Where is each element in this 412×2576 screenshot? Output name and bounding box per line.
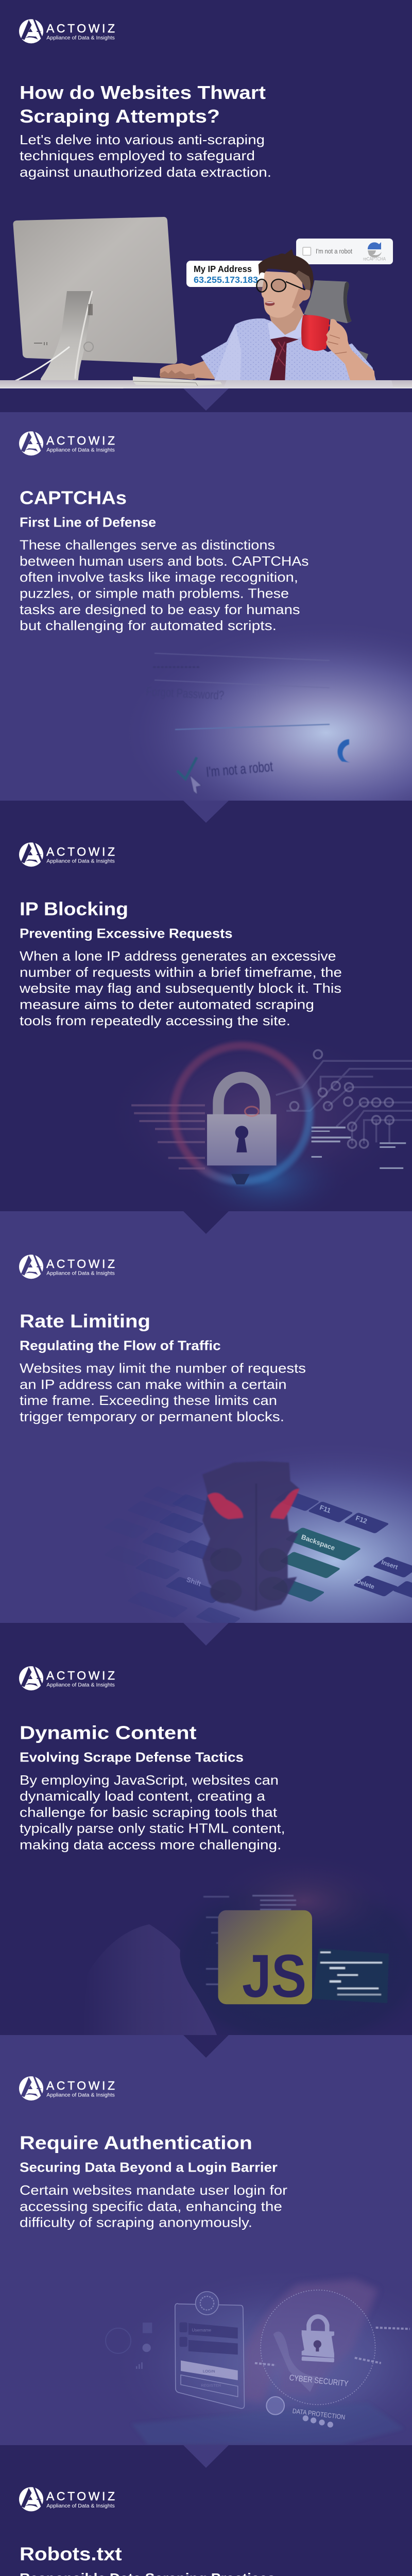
image: traffic light on keyboard: Backspace	[300, 1533, 336, 1552]
hooded person silhouette	[82, 1924, 217, 2036]
body text: tools from repeatedly accessing the site.	[20, 1013, 290, 1028]
keyboard	[133, 377, 222, 386]
logo: Actowiz: Appliance of Data & Insights	[46, 858, 115, 865]
image: blurred captcha screen: I'm not a robot	[205, 758, 273, 780]
logo: Actowiz: ACTOWIZ	[46, 22, 115, 35]
IP address card	[186, 261, 266, 287]
body text: trigger temporary or permanent blocks.	[20, 1409, 284, 1425]
image: traffic light on keyboard: Shift	[185, 1575, 202, 1588]
image: login form and cyber security globe: Username	[192, 2328, 212, 2333]
image: login form and cyber security globe: DATA PROTECTION	[292, 2407, 346, 2421]
arrow: down triangle	[183, 388, 229, 411]
heading: IP Blocking	[20, 899, 128, 919]
logo: Actowiz	[19, 19, 115, 43]
logo: Actowiz: ACTOWIZ	[46, 2079, 115, 2092]
panel: Robots.txt	[19, 2445, 276, 2576]
logo: Actowiz: Appliance of Data & Insights	[46, 2503, 115, 2509]
subheading: Evolving Scrape Defense Tactics	[20, 1749, 244, 1765]
heading: Require Authentication	[20, 2132, 252, 2153]
logo: Actowiz	[19, 2076, 115, 2100]
arrow: down triangle	[183, 1211, 229, 1234]
body text	[19, 948, 342, 1028]
logo: Actowiz: ACTOWIZ	[46, 845, 115, 858]
logo: Actowiz: ACTOWIZ	[46, 1257, 115, 1270]
image: blurred captcha screen: ••••••••••••	[152, 664, 200, 671]
image: padlock over circuit board	[103, 1025, 412, 1211]
image: traffic light on keyboard: F12	[355, 1514, 368, 1525]
logo: Actowiz: ACTOWIZ	[46, 2489, 115, 2503]
panel: IP Blocking	[19, 801, 412, 1207]
body text: between human users and bots. CAPTCHAs	[20, 553, 309, 569]
logo: Actowiz: ACTOWIZ	[46, 434, 115, 447]
image: login form and cyber security globe: CYBER SECURITY	[289, 2374, 349, 2388]
logo: Actowiz: ACTOWIZ	[46, 1669, 115, 1682]
logo: Actowiz: Appliance of Data & Insights	[46, 1270, 115, 1277]
arrow: down triangle	[183, 2035, 229, 2058]
logo: Actowiz	[19, 1255, 115, 1279]
desktop monitor from behind	[0, 217, 177, 388]
body text: When a lone IP address generates an excessive	[20, 948, 336, 963]
body text: time frame. Exceeding these limits can	[20, 1393, 277, 1408]
arrow: down triangle	[183, 2445, 229, 2468]
body text: often involve tasks like image recognition,	[20, 569, 298, 585]
IP address card: 63.255.173.183	[194, 275, 258, 285]
arrow: down triangle	[183, 801, 229, 823]
intro text: Let's delve into various anti-scraping	[20, 132, 265, 147]
body text: website may flag and subsequently block it. This	[19, 980, 341, 996]
body text: number of requests within a brief timeframe, the	[20, 964, 342, 980]
subheading: Regulating the Flow of Traffic	[20, 1337, 221, 1353]
body text: challenge for basic scraping tools that	[20, 1804, 278, 1820]
body text: Certain websites mandate user login for	[20, 2182, 287, 2198]
title: Scraping Attempts?	[20, 106, 220, 127]
title	[20, 82, 266, 127]
panel: Require Authentication	[0, 2035, 412, 2445]
body text: Websites may limit the number of requests	[20, 1360, 306, 1376]
body text	[20, 1360, 306, 1425]
logo: Actowiz: Appliance of Data & Insights	[46, 447, 115, 453]
logo: Actowiz	[19, 2487, 115, 2511]
heading: Dynamic Content	[20, 1722, 197, 1743]
arrow: down triangle	[183, 1623, 229, 1646]
intro text	[20, 132, 271, 180]
image: blurred captcha screen	[93, 618, 412, 804]
panel: hero introduction	[0, 19, 412, 411]
logo: Actowiz	[19, 842, 115, 867]
tooltip panel	[313, 1948, 389, 2003]
subheading: Securing Data Beyond a Login Barrier	[20, 2159, 278, 2175]
intro text: techniques employed to safeguard	[20, 148, 255, 163]
body text: measure aims to deter automated scraping	[20, 997, 314, 1012]
body text: an IP address can make within a certain	[20, 1377, 287, 1392]
panel: Dynamic Content	[19, 1623, 390, 2035]
reCAPTCHA card: reCAPTCHA	[363, 257, 386, 262]
body text	[20, 1772, 285, 1852]
reCAPTCHA card	[296, 239, 393, 264]
subheading: Preventing Excessive Requests	[20, 925, 233, 941]
logo: Actowiz: Appliance of Data & Insights	[46, 35, 115, 41]
body text: By employing JavaScript, websites can	[20, 1772, 279, 1788]
body text: but challenging for automated scripts.	[20, 618, 277, 633]
logo: Actowiz	[19, 1666, 115, 1690]
IP address card: My IP Address	[194, 264, 252, 274]
image: traffic light on keyboard	[103, 1432, 412, 1628]
image: login form and cyber security globe: REGISTER	[201, 2383, 221, 2388]
panel: CAPTCHAs	[0, 412, 412, 801]
image: traffic light on keyboard: Insert	[381, 1558, 399, 1571]
heading: Robots.txt	[20, 2543, 122, 2564]
title: How do Websites Thwart	[20, 82, 266, 103]
logo: Actowiz: Appliance of Data & Insights	[46, 1682, 115, 1688]
image: code editor with JS badge	[82, 1852, 412, 2036]
body text: dynamically load content, creating a	[20, 1788, 266, 1804]
body text: accessing specific data, enhancing the	[20, 2198, 282, 2214]
body text: difficulty of scraping anonymously.	[20, 2214, 252, 2230]
man at desk holding red mug	[160, 249, 376, 381]
logo: Actowiz: Appliance of Data & Insights	[46, 2092, 115, 2098]
intro text: against unauthorized data extraction.	[20, 164, 271, 180]
reCAPTCHA card: I'm not a robot	[316, 248, 352, 255]
body text	[20, 2182, 287, 2230]
subheading: First Line of Defense	[20, 514, 156, 530]
image: login form and cyber security globe	[103, 2262, 412, 2445]
JS badge	[218, 1910, 312, 2010]
heading: Rate Limiting	[20, 1311, 150, 1331]
image: blurred captcha screen: Forgot Password?	[146, 685, 225, 703]
panel: Rate Limiting	[0, 1211, 412, 1623]
image: login form and cyber security globe: LOGIN	[203, 2369, 215, 2374]
logo: Actowiz	[19, 431, 115, 455]
body text	[20, 537, 309, 633]
body text: puzzles, or simple math problems. These	[20, 586, 289, 601]
image: traffic light on keyboard: Delete	[355, 1578, 375, 1591]
body text: making data access more challenging.	[20, 1837, 281, 1852]
body text: tasks are designed to be easy for humans	[20, 602, 300, 617]
body text: typically parse only static HTML content,	[20, 1821, 285, 1836]
heading: CAPTCHAs	[20, 487, 127, 509]
image: traffic light on keyboard: F11	[319, 1503, 332, 1515]
JS badge: JS	[242, 1942, 306, 2010]
body text: These challenges serve as distinctions	[20, 537, 275, 552]
desk surface	[0, 380, 412, 388]
